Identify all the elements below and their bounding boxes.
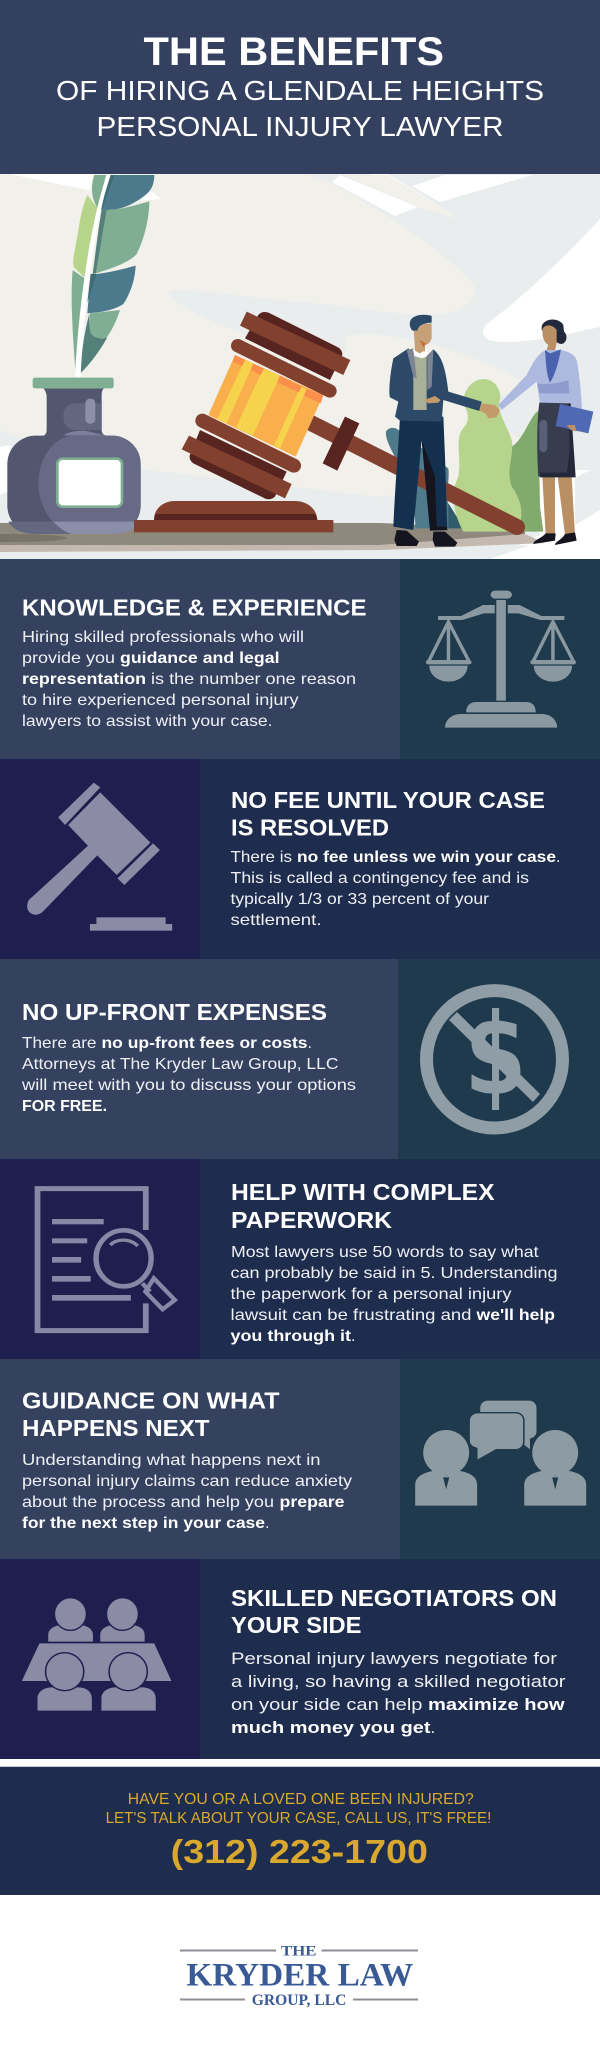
text block: personal injury claims can reduce anxiety (22, 1473, 352, 1490)
heading: YOUR SIDE (231, 1612, 362, 1638)
icon: people at negotiating table (22, 1598, 171, 1711)
text block: maximize how (428, 1695, 565, 1714)
text block: There are (22, 1035, 97, 1052)
call to action banner (0, 1766, 600, 1895)
heading: HAPPENS NEXT (22, 1415, 210, 1441)
icon: two people talking (415, 1401, 586, 1506)
heading: IS RESOLVED (231, 814, 389, 840)
text block: on your side can help (231, 1695, 422, 1714)
text block (22, 1452, 352, 1532)
text block: will meet with you to discuss your options (21, 1077, 356, 1094)
panel: help with complex paperwork (0, 1159, 600, 1359)
text block: guidance and legal (120, 650, 280, 667)
heading (231, 1585, 557, 1638)
quill feather (10, 174, 161, 377)
text block: . (556, 849, 560, 866)
icon: document and magnifier (37, 1189, 175, 1331)
heading (231, 1179, 495, 1233)
illustration: quill, gavel and handshake (0, 174, 600, 559)
text block: is the number one reason (151, 671, 356, 688)
text block: There is (230, 849, 292, 866)
text block: . (430, 1718, 435, 1737)
heading (22, 1388, 280, 1441)
text block: much money you get (231, 1718, 431, 1737)
text block: FOR FREE. (22, 1098, 107, 1115)
text block (230, 1244, 558, 1345)
text block (22, 629, 356, 730)
icon: scales of justice (426, 591, 576, 728)
call to action text: HAVE YOU OR A LOVED ONE BEEN INJURED? (128, 1791, 474, 1808)
phone number: (312) 223-1700 (171, 1833, 428, 1870)
text block: Attorneys at The Kryder Law Group, LLC (22, 1056, 338, 1073)
text block (21, 1035, 356, 1115)
text block: . (308, 1035, 312, 1052)
heading: GUIDANCE ON WHAT (22, 1388, 280, 1414)
heading: PAPERWORK (231, 1207, 392, 1233)
text block: for the next step in your case (22, 1515, 265, 1532)
title: PERSONAL INJURY LAWYER (96, 111, 503, 142)
heading (231, 787, 545, 840)
panel: knowledge and experience (0, 559, 600, 759)
text block: no fee unless we win your case (297, 849, 556, 866)
title: OF HIRING A GLENDALE HEIGHTS (56, 75, 544, 106)
logo: The Kryder Law Group, LLC: THE (281, 1944, 316, 1960)
panel: guidance on what happens next (0, 1359, 600, 1559)
heading: NO FEE UNTIL YOUR CASE (231, 787, 545, 813)
text block: no up-front fees or costs (102, 1035, 308, 1052)
heading: SKILLED NEGOTIATORS ON (231, 1585, 557, 1611)
text block: we'll help (475, 1307, 555, 1324)
text block: Hiring skilled professionals who will (22, 629, 304, 646)
heading: KNOWLEDGE & EXPERIENCE (22, 594, 366, 620)
bushes (386, 379, 543, 532)
logo: The Kryder Law Group, LLC (180, 1944, 418, 2009)
logo: The Kryder Law Group, LLC: GROUP, LLC (252, 1992, 346, 2009)
panel: no fee until resolved (0, 759, 600, 959)
text block: representation (22, 671, 146, 688)
businessman (389, 315, 500, 547)
text block: can probably be said in 5. Understanding (230, 1265, 558, 1282)
gavel (134, 312, 517, 532)
icon: gavel (27, 783, 172, 931)
text block: lawsuit can be frustrating and (230, 1307, 472, 1324)
panel: skilled negotiators (0, 1559, 600, 1759)
title: THE BENEFITS (144, 30, 444, 74)
text block: . (351, 1328, 355, 1345)
text block (231, 1649, 566, 1737)
businesswoman (498, 320, 593, 545)
text block: settlement. (230, 912, 322, 929)
text block: you through it (230, 1328, 352, 1345)
text block (230, 849, 560, 929)
call to action text (106, 1791, 491, 1827)
floor (0, 523, 545, 559)
text block: to hire experienced personal injury (22, 692, 298, 709)
text block: Personal injury lawyers negotiate for (231, 1649, 557, 1668)
text block: typically 1/3 or 33 percent of your (230, 891, 490, 908)
text block: prepare (280, 1494, 345, 1511)
text block: This is called a contingency fee and is (230, 870, 529, 887)
heading: HELP WITH COMPLEX (231, 1179, 495, 1205)
ink bottle (7, 378, 141, 534)
text block: the paperwork for a personal injury (230, 1286, 512, 1303)
text block: Understanding what happens next in (22, 1452, 320, 1469)
text block: about the process and help you (22, 1494, 274, 1511)
text block: a living, so having a skilled negotiator (231, 1672, 566, 1691)
text block: lawyers to assist with your case. (22, 713, 272, 730)
icon: no dollar sign (426, 990, 562, 1128)
panel: no up-front expenses (0, 959, 600, 1159)
icon: no dollar sign: $ (464, 990, 526, 1120)
header banner (0, 0, 600, 174)
call to action text: LET'S TALK ABOUT YOUR CASE, CALL US, IT'S FREE! (106, 1810, 491, 1827)
text block: Most lawyers use 50 words to say what (231, 1244, 539, 1261)
text block: . (265, 1515, 269, 1532)
title (56, 30, 544, 142)
heading: NO UP-FRONT EXPENSES (22, 999, 327, 1025)
text block: provide you (22, 650, 115, 667)
logo: The Kryder Law Group, LLC: KRYDER LAW (186, 1958, 413, 1994)
